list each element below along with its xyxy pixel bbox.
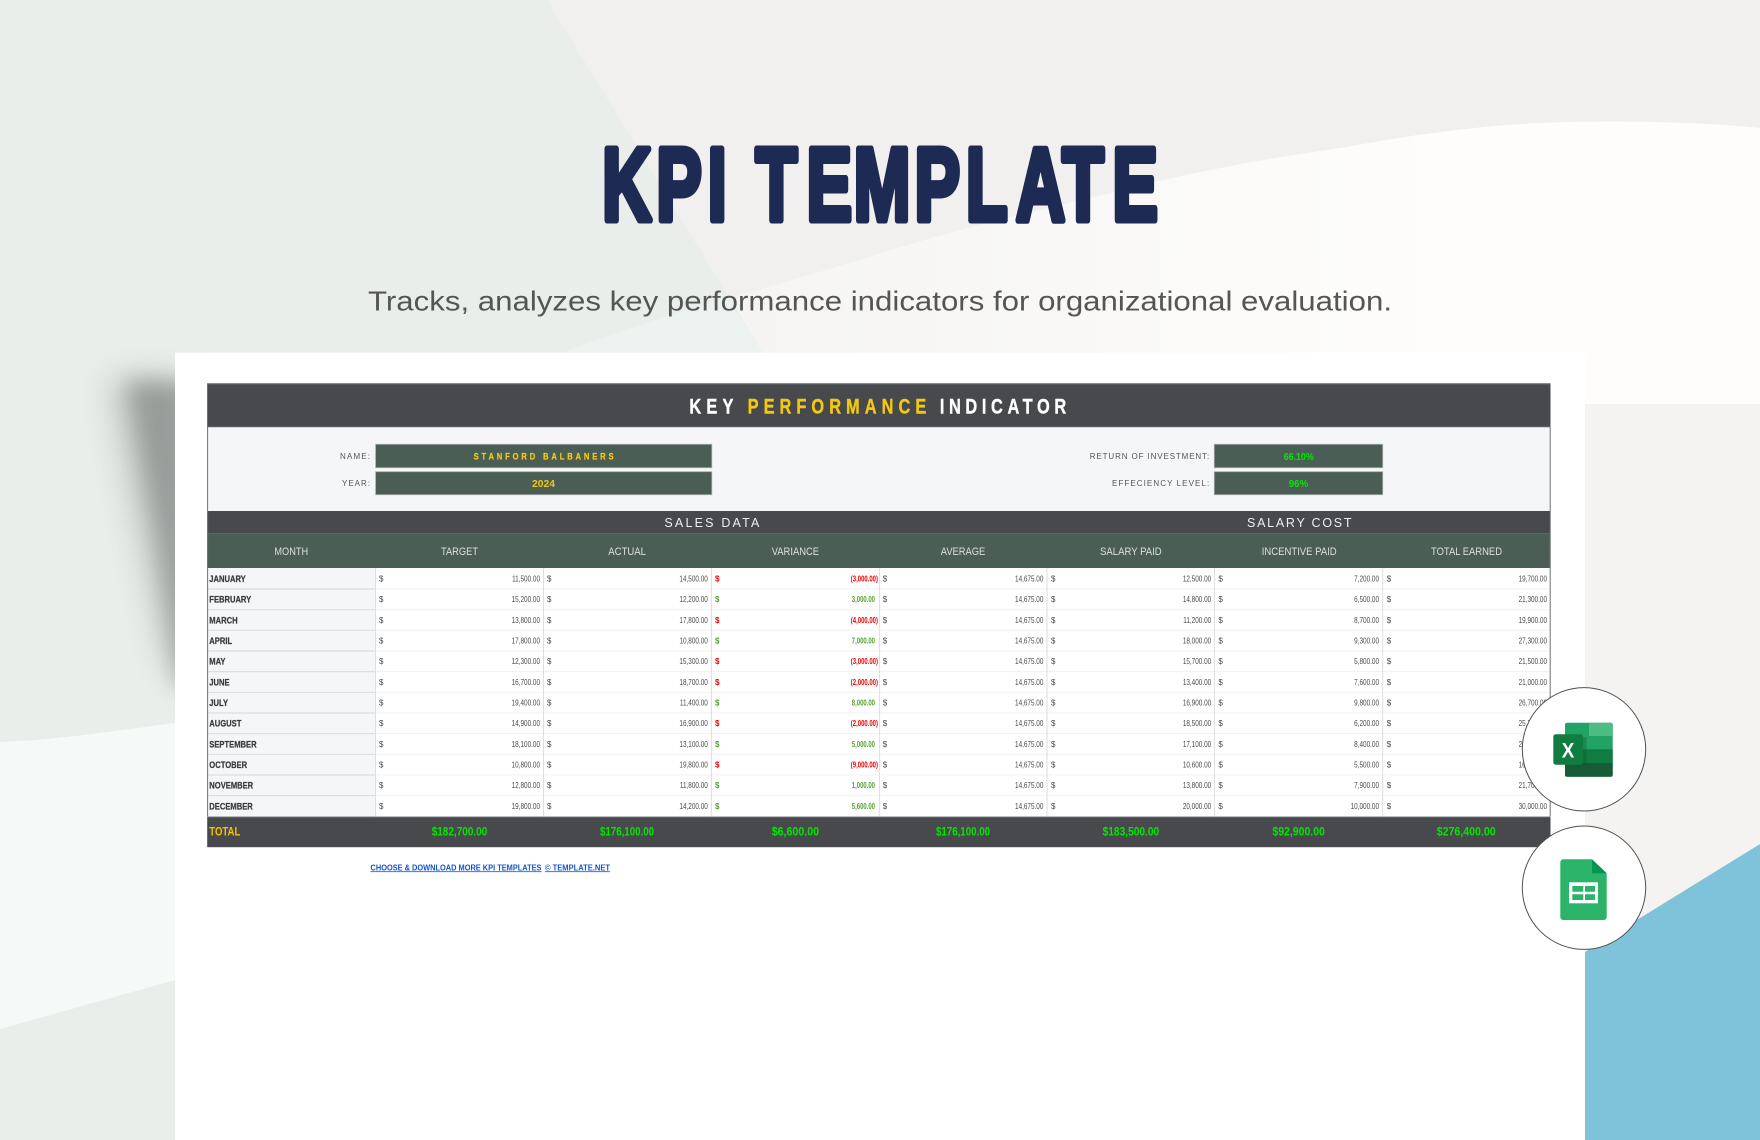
column: target: $ [379, 802, 384, 811]
column: variance: (2,000.00) [851, 677, 878, 687]
column: incentive paid: 8,700.00 [1354, 615, 1379, 625]
column: total earned: $ [1387, 616, 1392, 625]
table header band: PERFORMANCE [748, 394, 926, 418]
column: salary paid: 17,100.00 [1183, 739, 1211, 749]
info panel [207, 427, 1551, 511]
field: efficiency level: 96% [1289, 479, 1308, 490]
column: target: $ [379, 781, 384, 790]
column: variance: $ [715, 781, 720, 790]
column: variance: 5,600.00 [852, 801, 875, 811]
column: average: 14,675.00 [1015, 718, 1043, 728]
column: salary paid: $ [1051, 678, 1056, 687]
column: total earned: 26,700.00 [1519, 698, 1547, 708]
column: actual: $ [547, 802, 552, 811]
column: incentive paid: $ [1218, 760, 1223, 770]
section band: SALES DATA [664, 516, 760, 530]
field: return of investment: RETURN OF INVESTMENT: [1090, 452, 1209, 461]
column headers: VARIANCE [772, 546, 819, 558]
column: average: $ [883, 678, 888, 687]
column: incentive paid: $ [1218, 802, 1223, 811]
field: year: 2024 [532, 479, 555, 490]
column: variance [715, 574, 878, 811]
total row: $183,500.00 [1103, 825, 1159, 839]
total row: $176,100.00 [936, 825, 990, 839]
column headers: ACTUAL [608, 546, 646, 558]
column: variance: $ [715, 595, 720, 604]
column: incentive paid: $ [1218, 740, 1223, 749]
column: salary paid: $ [1051, 698, 1056, 708]
column: total earned: 21,500.00 [1519, 656, 1547, 666]
column headers: TOTAL EARNED [1431, 546, 1502, 558]
column: variance: 3,000.00 [852, 594, 875, 604]
template link: © TEMPLATE.NET [545, 863, 610, 872]
field: year: YEAR: [342, 479, 370, 488]
month labels: MAY [209, 656, 226, 667]
column: total earned: 21,000.00 [1519, 677, 1547, 687]
column: incentive paid: 9,300.00 [1354, 636, 1379, 646]
column: incentive paid: $ [1218, 781, 1223, 790]
column: average: 14,675.00 [1015, 636, 1043, 646]
column: average [883, 574, 1043, 811]
column headers [207, 534, 1551, 568]
column: actual [547, 574, 708, 811]
column: average: $ [883, 760, 888, 770]
field: name [340, 444, 712, 468]
column: actual: $ [547, 678, 552, 687]
column: incentive paid: $ [1218, 698, 1223, 708]
column: total earned: 19,700.00 [1519, 574, 1547, 584]
column: total earned: $ [1387, 657, 1392, 666]
column: incentive paid: 6,500.00 [1354, 594, 1379, 604]
column: target: $ [379, 760, 384, 770]
column: variance: $ [715, 575, 720, 584]
total row: $182,700.00 [432, 825, 488, 839]
month labels: DECEMBER [209, 800, 253, 812]
column: total earned: 27,300.00 [1519, 636, 1547, 646]
column: actual: $ [547, 740, 552, 749]
column: variance: (3,000.00) [851, 656, 878, 666]
column: total earned: $ [1387, 575, 1392, 584]
month labels: JUNE [209, 676, 230, 688]
column: actual: 10,800.00 [679, 636, 708, 646]
table header band: KEY [689, 394, 734, 418]
column: average: $ [883, 575, 888, 584]
column: average: 14,675.00 [1015, 739, 1043, 749]
column: actual: 18,700.00 [679, 677, 708, 687]
column: actual: 12,200.00 [679, 594, 708, 604]
column: incentive paid: $ [1218, 575, 1223, 584]
column: salary paid: 20,000.00 [1183, 801, 1211, 811]
column: target: 16,700.00 [512, 677, 540, 687]
column: variance: $ [715, 802, 720, 811]
column: incentive paid: $ [1218, 657, 1223, 666]
column: total earned: 25,500.00 [1519, 739, 1547, 749]
card shadow [100, 361, 175, 696]
column: total earned: $ [1387, 719, 1392, 728]
column: incentive paid: 5,500.00 [1354, 760, 1379, 770]
column: salary paid: 13,400.00 [1183, 677, 1211, 687]
month labels: NOVEMBER [209, 780, 254, 791]
title: KPI TEMPLATE [602, 128, 1158, 242]
column: target: 15,200.00 [512, 594, 540, 604]
column: salary paid: 13,800.00 [1183, 780, 1211, 790]
column headers: SALARY PAID [1100, 546, 1162, 558]
column: incentive paid: $ [1218, 678, 1223, 687]
column: incentive paid: $ [1218, 595, 1223, 604]
section band [207, 511, 1551, 534]
column: total earned: $ [1387, 698, 1392, 708]
column: target: $ [379, 740, 384, 749]
column: variance: $ [715, 678, 720, 687]
template link: CHOOSE & DOWNLOAD MORE KPI TEMPLATES [370, 863, 542, 872]
column: variance: (3,000.00) [851, 574, 878, 584]
total row: TOTAL [209, 825, 240, 839]
field: return of investment: 66.10% [1284, 452, 1314, 463]
column headers: TARGET [441, 546, 478, 558]
white card [175, 353, 1585, 1140]
column: variance: $ [715, 657, 720, 666]
column: average: $ [883, 698, 888, 708]
column: average: 14,675.00 [1015, 760, 1043, 770]
column: actual: $ [547, 657, 552, 666]
column: salary paid: $ [1051, 575, 1056, 584]
column: salary paid: 18,000.00 [1183, 636, 1211, 646]
column: average: $ [883, 781, 888, 790]
column headers: MONTH [274, 546, 308, 558]
column: incentive paid: 9,800.00 [1354, 698, 1379, 708]
column: total earned: $ [1387, 781, 1392, 790]
column: actual: 15,300.00 [679, 656, 708, 666]
column: target: $ [379, 636, 384, 646]
column: actual: 11,800.00 [680, 780, 708, 790]
column: actual: 13,100.00 [679, 739, 708, 749]
month labels: AUGUST [209, 718, 242, 729]
column: total earned: 21,300.00 [1519, 594, 1547, 604]
total row: $176,100.00 [600, 825, 654, 839]
field: efficiency level: EFFECIENCY LEVEL: [1112, 479, 1209, 488]
column: incentive paid: 8,400.00 [1354, 739, 1379, 749]
column: target: 19,400.00 [512, 698, 540, 708]
column: total earned: $ [1387, 678, 1392, 687]
column: total earned: $ [1387, 636, 1392, 646]
column: salary paid: $ [1051, 802, 1056, 811]
icon: excel: X [1562, 739, 1574, 762]
column: salary paid: 14,800.00 [1183, 594, 1211, 604]
column: salary paid: $ [1051, 740, 1056, 749]
field: name: NAME: [340, 452, 370, 461]
column: average: 14,675.00 [1015, 677, 1043, 687]
column: total earned: 30,000.00 [1519, 801, 1547, 811]
column: incentive paid: 7,900.00 [1354, 780, 1379, 790]
column: incentive paid: 5,800.00 [1354, 656, 1379, 666]
column: actual: $ [547, 616, 552, 625]
column: variance: 7,000.00 [852, 635, 875, 646]
month labels: FEBRUARY [209, 594, 251, 605]
column: target [379, 574, 540, 811]
column: variance: (9,000.00) [851, 759, 878, 770]
column: average: 14,675.00 [1015, 801, 1043, 811]
column: actual: $ [547, 781, 552, 790]
column: incentive paid: $ [1218, 719, 1223, 728]
column: incentive paid: 6,200.00 [1354, 718, 1379, 728]
column: salary paid: $ [1051, 595, 1056, 604]
column: salary paid: 10,600.00 [1183, 760, 1211, 770]
subtitle: Tracks, analyzes key performance indicators for organizational evaluation. [368, 286, 1392, 317]
column: target: $ [379, 595, 384, 604]
table header band [207, 383, 1551, 428]
column: incentive paid: $ [1218, 636, 1223, 646]
column: actual: $ [547, 698, 552, 708]
column: total earned [1387, 574, 1547, 811]
column: salary paid [1051, 574, 1211, 811]
total row: $92,900.00 [1272, 825, 1325, 839]
month labels: JANUARY [209, 573, 246, 584]
column: variance: $ [715, 698, 720, 708]
column: variance: (2,000.00) [851, 718, 878, 728]
column: total earned: 25,700.00 [1519, 718, 1547, 728]
column: total earned: $ [1387, 802, 1392, 811]
column: actual: 14,500.00 [679, 574, 708, 584]
column: salary paid: $ [1051, 760, 1056, 770]
column: average: 14,675.00 [1015, 698, 1043, 708]
column: average: $ [883, 740, 888, 749]
column: target: 14,900.00 [512, 718, 540, 728]
total row: $6,600.00 [772, 825, 819, 839]
column: average: $ [883, 719, 888, 728]
column: average: $ [883, 636, 888, 646]
column: average: 14,675.00 [1015, 594, 1043, 604]
column: actual: $ [547, 719, 552, 728]
icon: google sheets [1522, 826, 1646, 949]
month labels: MARCH [209, 614, 238, 626]
column: actual: 11,400.00 [680, 698, 708, 708]
column: target: $ [379, 657, 384, 666]
column headers: AVERAGE [941, 546, 985, 558]
column: actual: $ [547, 760, 552, 770]
month labels: SEPTEMBER [209, 738, 257, 750]
column: incentive paid: 10,000.00 [1351, 801, 1379, 811]
section band: SALARY COST [1247, 516, 1352, 530]
column: variance: $ [715, 740, 720, 749]
column: salary paid: 11,200.00 [1183, 615, 1211, 625]
column: actual: 16,900.00 [679, 718, 708, 728]
field: return of investment [1090, 444, 1383, 468]
column: total earned: $ [1387, 740, 1392, 749]
column: variance: $ [715, 760, 720, 770]
field: year [342, 472, 712, 495]
field: name: STANFORD BALBANERS [474, 451, 614, 462]
total row: $276,400.00 [1437, 825, 1496, 839]
column: incentive paid: 7,200.00 [1354, 574, 1379, 584]
column: average: 14,675.00 [1015, 656, 1043, 666]
column: total earned: 21,700.00 [1519, 780, 1547, 790]
column: salary paid: $ [1051, 719, 1056, 728]
column: salary paid: $ [1051, 636, 1056, 646]
column: variance: (4,000.00) [851, 615, 878, 625]
column: salary paid: 18,500.00 [1183, 718, 1211, 728]
column: salary paid: 16,900.00 [1183, 698, 1211, 708]
column: target: $ [379, 719, 384, 728]
month labels: OCTOBER [209, 759, 248, 770]
column: salary paid: $ [1051, 616, 1056, 625]
column: target: 18,100.00 [512, 739, 540, 749]
column: target: 10,800.00 [512, 760, 540, 770]
column: target: 13,800.00 [512, 615, 540, 625]
column: variance: $ [715, 719, 720, 728]
column: average: $ [883, 802, 888, 811]
column: incentive paid: $ [1218, 616, 1223, 625]
column: average: 14,675.00 [1015, 574, 1043, 584]
column: actual: $ [547, 595, 552, 604]
column: average: $ [883, 616, 888, 625]
column: average: 14,675.00 [1015, 780, 1043, 790]
column: salary paid: 12,500.00 [1183, 574, 1211, 584]
table header band: INDICATOR [940, 394, 1067, 418]
column: variance: 1,000.00 [852, 780, 875, 790]
column: average: $ [883, 657, 888, 666]
column: target: $ [379, 678, 384, 687]
column: variance: $ [715, 616, 720, 625]
column: target: 19,800.00 [512, 801, 540, 811]
column: target: 11,500.00 [512, 574, 540, 584]
month labels: JULY [209, 697, 228, 708]
column: total earned: 19,900.00 [1519, 615, 1547, 625]
column: salary paid: $ [1051, 657, 1056, 666]
column: salary paid: $ [1051, 781, 1056, 790]
column: target: $ [379, 698, 384, 708]
column: actual: 19,800.00 [679, 760, 708, 770]
column: variance: 5,000.00 [852, 739, 875, 749]
column: actual: $ [547, 636, 552, 646]
column: salary paid: 15,700.00 [1183, 656, 1211, 666]
column: actual: 17,800.00 [679, 615, 708, 625]
column: total earned: 16,100.00 [1519, 760, 1547, 770]
KPI table panel [207, 383, 1551, 872]
column: target: 12,800.00 [512, 780, 540, 790]
column: average: 14,675.00 [1015, 615, 1043, 625]
column: actual: 14,200.00 [679, 801, 708, 811]
column: target: $ [379, 575, 384, 584]
icon: excel [1522, 688, 1646, 811]
column: actual: $ [547, 575, 552, 584]
column: target: $ [379, 616, 384, 625]
column: target: 12,300.00 [512, 656, 540, 666]
column: variance: 8,000.00 [852, 697, 875, 708]
column: variance: $ [715, 636, 720, 646]
table body grid [207, 427, 1551, 817]
total row [207, 816, 1551, 848]
month labels: APRIL [209, 635, 232, 646]
month labels [209, 573, 257, 812]
column headers: INCENTIVE PAID [1262, 546, 1337, 558]
column: total earned: $ [1387, 595, 1392, 604]
column: average: $ [883, 595, 888, 604]
column: incentive paid [1218, 574, 1379, 811]
column: target: 17,800.00 [512, 636, 540, 646]
field: efficiency level [1112, 472, 1383, 495]
column: incentive paid: 7,600.00 [1354, 677, 1379, 687]
column: total earned: $ [1387, 760, 1392, 770]
